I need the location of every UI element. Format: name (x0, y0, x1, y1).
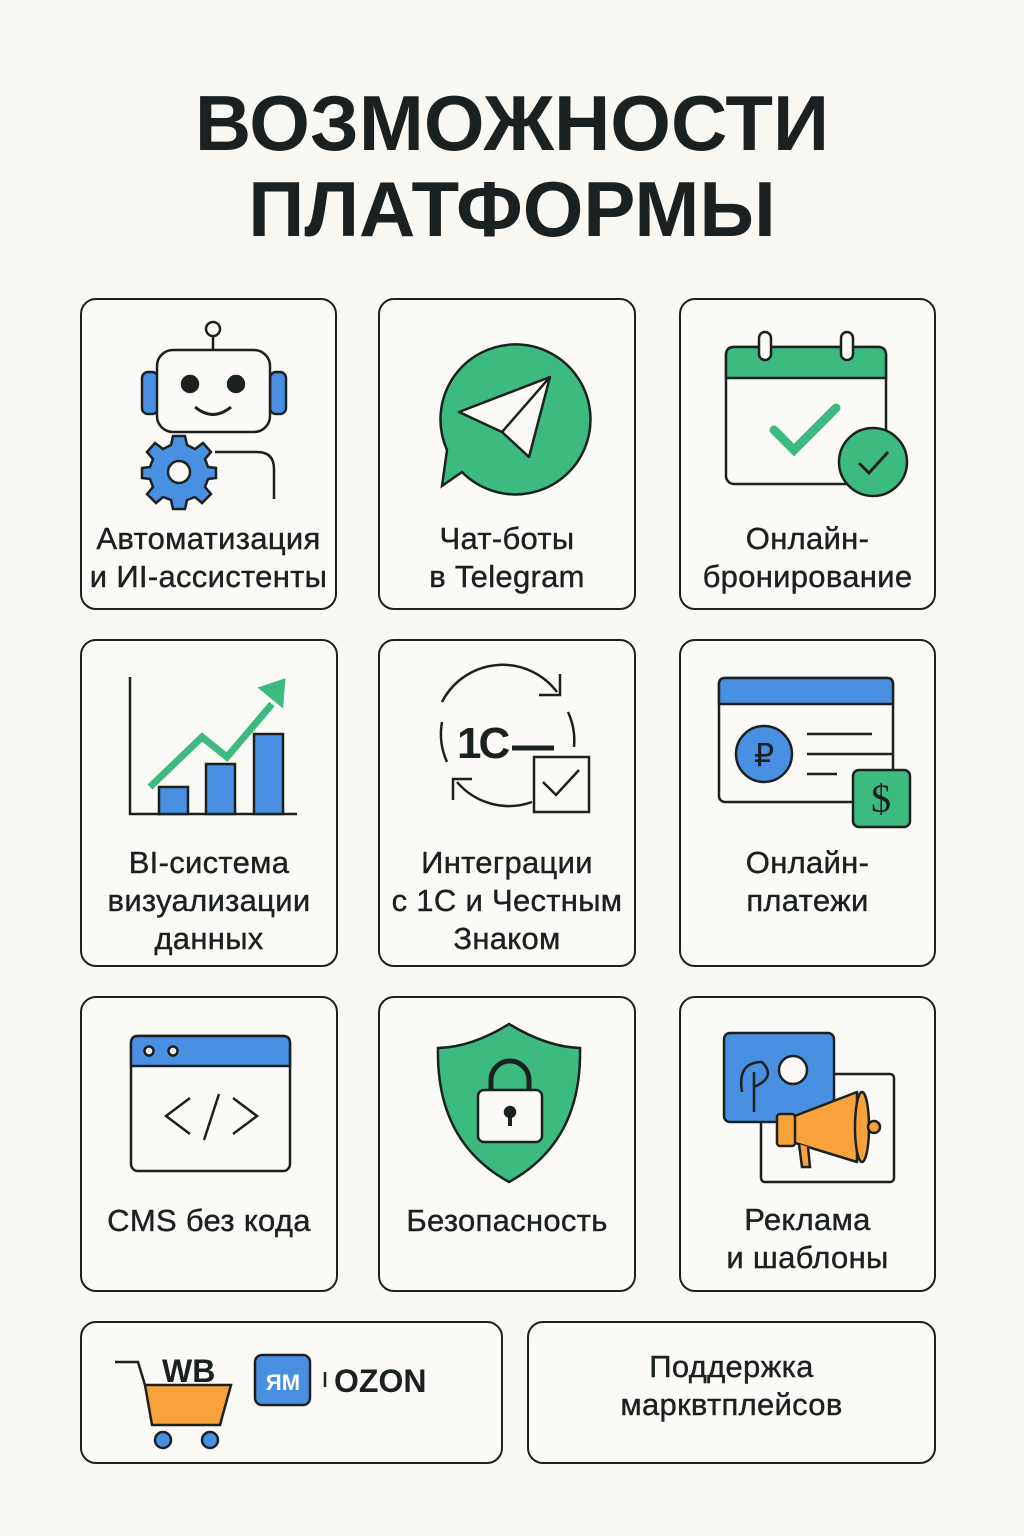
panel: booking (679, 298, 936, 610)
text: BI (108, 845, 310, 956)
text: telegram: в Telegram (429, 559, 585, 594)
icon: payment window: ₽ (754, 736, 774, 774)
text: BI: данных (154, 921, 264, 956)
text: automation: и ИI-ассистенты (90, 559, 327, 594)
text: telegram: Чат-боты (440, 521, 574, 556)
icon: cart and logos: WB (162, 1353, 215, 1389)
text: marketplaces (620, 1349, 843, 1422)
icon: 1C sync (440, 664, 590, 814)
icon: bar chart (128, 677, 297, 816)
text: telegram (429, 521, 585, 594)
text: 1C: Знаком (453, 921, 561, 956)
icon: calendar (724, 330, 908, 498)
icon: image and megaphone (722, 1032, 896, 1184)
icon: cart and logos (115, 1353, 426, 1450)
icon: telegram bubble (439, 343, 592, 496)
icon: cart and logos: OZON (334, 1363, 426, 1399)
text: BI: визуализации (108, 883, 310, 918)
icon: 1C sync: 1С (457, 719, 509, 768)
panel: automation (80, 298, 337, 610)
icon: cart and logos: ЯМ (266, 1370, 300, 1395)
text: booking: бронирование (703, 559, 912, 594)
icon: payment window (718, 676, 912, 828)
text: ads: и шаблоны (726, 1240, 889, 1275)
text: ads: Реклама (744, 1202, 871, 1237)
text: marketplaces: марквтплейсов (620, 1387, 843, 1422)
panel: security (378, 996, 636, 1292)
panel: marketplaces logos (80, 1321, 503, 1464)
panel: ads (679, 996, 936, 1292)
title: ВОЗМОЖНОСТИ (195, 79, 829, 167)
icon: robot with gear (140, 320, 288, 510)
title (195, 79, 829, 253)
text: 1C: с 1С и Честным (392, 883, 622, 918)
title: ПЛАТФОРМЫ (248, 165, 776, 253)
text: security: Безопасность (406, 1203, 608, 1238)
panel: 1C integration (378, 639, 636, 967)
text: CMS: CMS без кода (107, 1203, 311, 1238)
panel: marketplaces text (527, 1321, 936, 1464)
text: BI: BI-система (129, 845, 289, 880)
icon: code window (130, 1034, 292, 1172)
text: automation: Автоматизация (96, 521, 321, 556)
text: 1C (392, 845, 622, 956)
text: automation (90, 521, 327, 594)
text: ads (726, 1202, 889, 1275)
text: 1C: Интеграции (421, 845, 593, 880)
text: booking (703, 521, 912, 594)
text: payments: Онлайн- (746, 845, 869, 880)
text: payments: платежи (746, 883, 869, 918)
panel: BI (80, 639, 338, 967)
panel: telegram (378, 298, 636, 610)
panel: payments (679, 639, 936, 967)
text: marketplaces: Поддержка (649, 1349, 814, 1384)
text: booking: Онлайн- (746, 521, 869, 556)
text: payments (746, 845, 869, 918)
icon: payment window: $ (871, 776, 891, 821)
icon: shield lock (436, 1022, 582, 1184)
panel: CMS (80, 996, 338, 1292)
